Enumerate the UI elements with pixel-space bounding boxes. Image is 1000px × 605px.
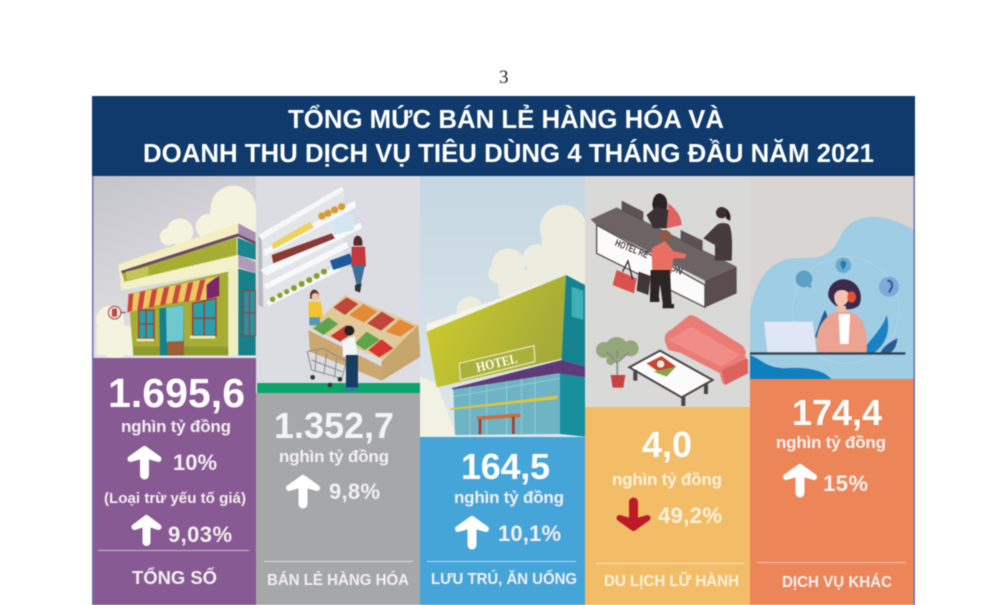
title line 2: DOANH THU DỊCH VỤ TIÊU DÙNG 4 THÁNG ĐẦU NĂM 2021 <box>143 138 874 168</box>
change value: 9,8% <box>329 479 380 504</box>
title banner <box>92 96 915 176</box>
woman at shelf <box>330 236 366 293</box>
agent <box>816 279 867 353</box>
illustration: hotel reception and lobby <box>585 176 750 407</box>
unit: nghìn tỷ đồng <box>454 488 564 507</box>
page number: 3 <box>499 67 508 88</box>
door and windows <box>159 305 184 355</box>
label: DU LỊCH LỮ HÀNH <box>604 570 739 590</box>
receptionist left <box>647 193 682 228</box>
label: DỊCH VỤ KHÁC <box>782 572 892 591</box>
luggage <box>613 261 651 295</box>
potted plant <box>596 337 639 388</box>
illustration: supermarket <box>258 187 421 391</box>
adjusted change value: 9,03% <box>168 522 232 547</box>
shelves <box>258 187 362 307</box>
change value: 15% <box>823 471 868 496</box>
reception desk: ON <box>668 263 684 278</box>
change value: 10% <box>173 450 217 475</box>
laptop <box>764 322 817 353</box>
value: 1.695,6 <box>108 370 245 416</box>
hotel sign: HOTEL <box>475 351 519 375</box>
change value: 49,2% <box>658 503 722 528</box>
awning <box>127 276 219 313</box>
reception desk: HOTEL RE <box>613 238 650 261</box>
reception desk <box>591 201 737 307</box>
unit: nghìn tỷ đồng <box>279 447 389 466</box>
corner column and side wall <box>228 269 238 355</box>
panel: tourism (DU LỊCH LỮ HÀNH) <box>585 407 750 605</box>
panel: retail goods (BÁN LẺ HÀNG HÓA) <box>256 176 420 605</box>
value: 1.352,7 <box>274 405 394 446</box>
cloud behind shop <box>96 186 257 358</box>
coffee table <box>629 351 713 406</box>
value: 164,5 <box>461 446 550 487</box>
panel: accommodation and catering (LƯU TRÚ, ĂN UỐNG) <box>420 437 585 605</box>
illustration: hotel building <box>420 176 587 437</box>
icon: up arrow <box>786 467 814 493</box>
icon: down arrow <box>620 502 648 528</box>
clouds <box>420 205 587 437</box>
orbit with chat, pin and ear icons <box>793 257 899 363</box>
value: 174,4 <box>792 392 882 433</box>
label: TỔNG SỐ <box>132 567 217 588</box>
unit: nghìn tỷ đồng <box>612 470 722 489</box>
label: BÁN LẺ HÀNG HÓA <box>267 570 409 589</box>
panel: other services (DỊCH VỤ KHÁC) <box>750 379 914 605</box>
icon: up arrow <box>289 478 317 504</box>
title line 1: TỔNG MỨC BÁN LẺ HÀNG HÓA VÀ <box>288 104 724 134</box>
hotel entrance bench <box>477 413 521 434</box>
unit: nghìn tỷ đồng <box>121 417 231 436</box>
illustration: shop storefront <box>93 176 257 358</box>
background blob <box>750 217 914 383</box>
green floor band <box>257 383 420 393</box>
sofa <box>665 315 748 385</box>
label: LƯU TRÚ, ĂN UỐNG <box>431 568 577 588</box>
illustration: customer service agent <box>750 176 914 383</box>
receptionist right <box>703 207 732 261</box>
icon: up arrow <box>130 449 158 475</box>
guest in red <box>650 230 687 308</box>
shopper with cart <box>307 326 358 391</box>
panel: total retail (TỔNG SỐ) <box>93 358 256 605</box>
icon: up arrow <box>458 519 486 545</box>
icon: up arrow <box>134 518 158 542</box>
leaves <box>815 310 897 354</box>
value: 4,0 <box>642 424 692 465</box>
fruit crate stand <box>308 295 421 381</box>
note: (Loại trừ yếu tố giá) <box>104 490 246 507</box>
woman in yellow <box>308 289 323 325</box>
unit: nghìn tỷ đồng <box>776 433 886 452</box>
change value: 10,1% <box>498 521 561 546</box>
hotel sign <box>459 346 535 380</box>
hanging shop sign <box>108 306 126 319</box>
